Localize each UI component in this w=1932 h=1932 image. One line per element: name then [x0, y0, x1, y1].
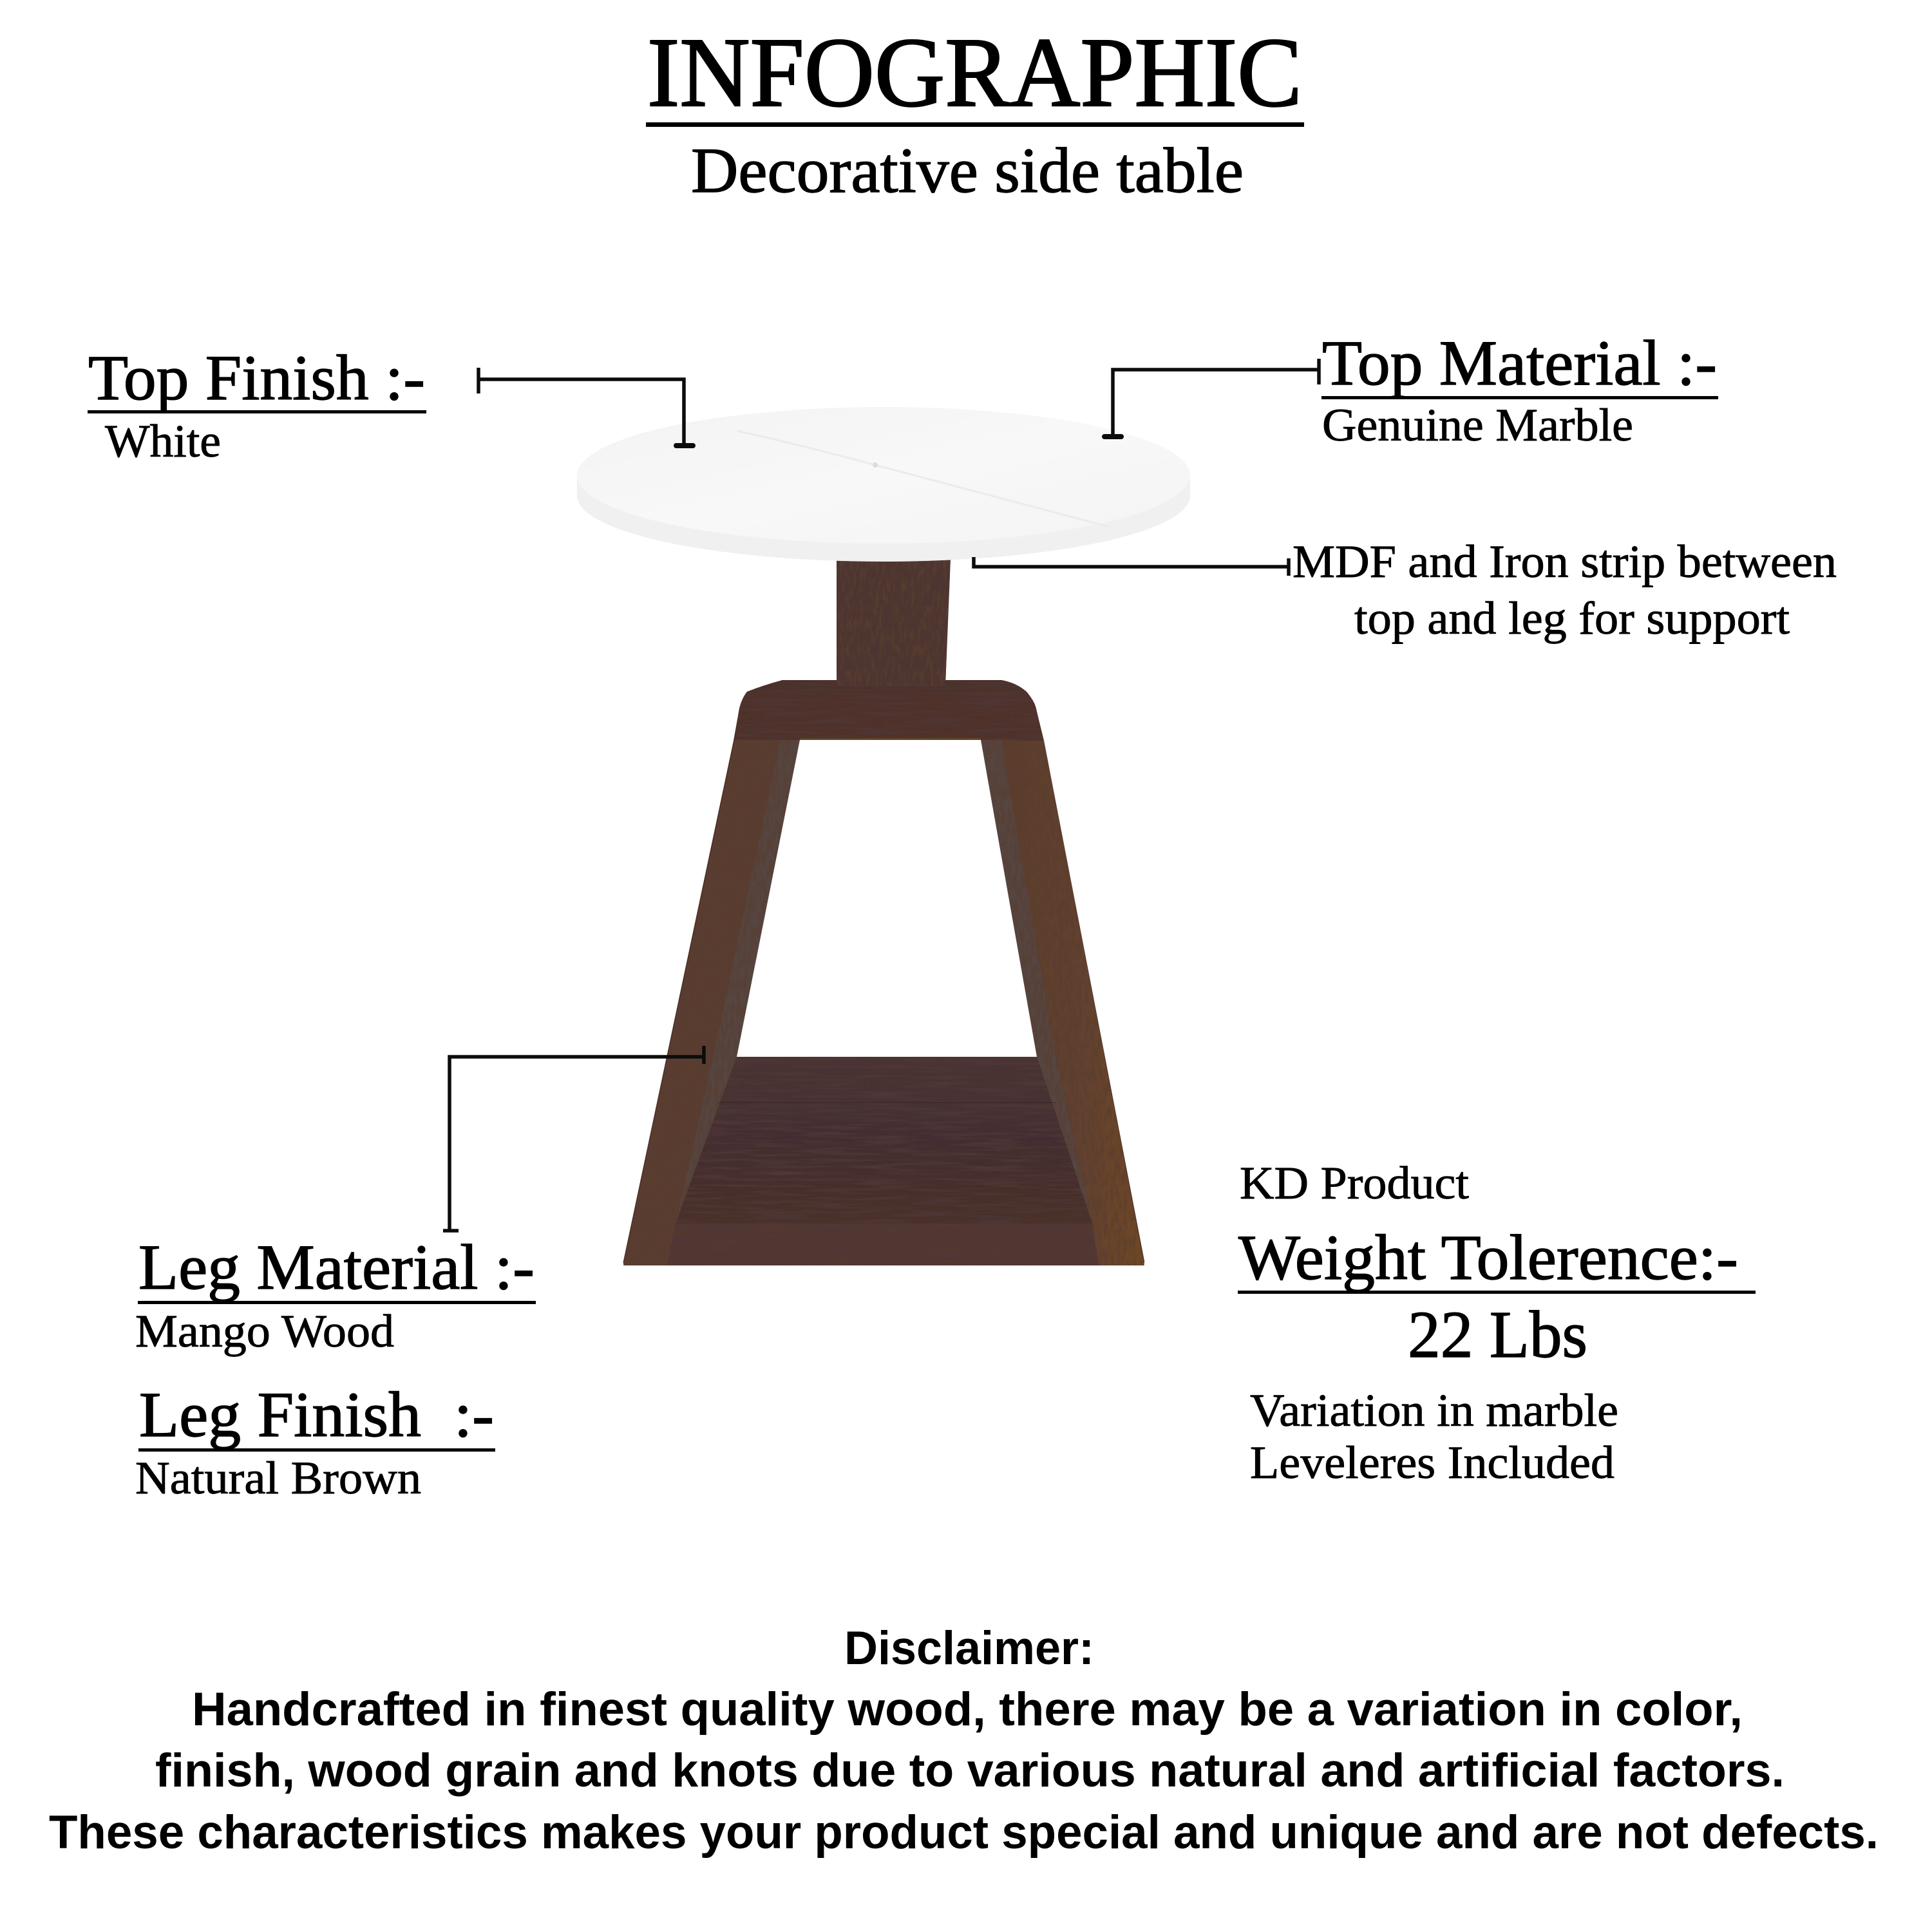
label: support strip note: [1293, 536, 1837, 644]
subtitle: Decorative side table: [691, 135, 1244, 206]
label: top material: [1321, 327, 1718, 451]
frame top plate: [747, 680, 1027, 692]
value: White: [105, 415, 221, 467]
marble center mark: [873, 462, 878, 468]
label: leg material: [135, 1231, 536, 1357]
table base frame: [623, 680, 1144, 1265]
connector: top material: [1104, 359, 1319, 437]
marble variation note: Variation in marble: [1250, 1385, 1618, 1436]
connector: MDF and iron strip: [974, 557, 1289, 576]
base front rail: [667, 1224, 1099, 1265]
disclaimer line three: These characteristics makes your product special and unique and are not defects.: [49, 1806, 1879, 1859]
line one: MDF and Iron strip between: [1293, 536, 1837, 587]
center post: [837, 559, 951, 686]
floor plank seam: [718, 1102, 1056, 1103]
marble veins: [737, 431, 1109, 527]
disclaimer: [49, 1622, 1879, 1859]
connector: leg material: [443, 1046, 704, 1231]
label: product specs: [1238, 1157, 1756, 1488]
connector: top finish: [478, 368, 693, 446]
right inner face: [981, 740, 1092, 1224]
crossbar lower highlight: [800, 738, 981, 740]
product: side table illustration: [577, 407, 1190, 1265]
title: INFOGRAPHIC: [647, 18, 1302, 128]
disclaimer line one: Handcrafted in finest quality wood, there may be a variation in color,: [192, 1683, 1743, 1736]
value: Genuine Marble: [1322, 399, 1633, 451]
underline: [138, 1301, 536, 1304]
value: Natural Brown: [135, 1452, 421, 1504]
left leg: [623, 740, 781, 1265]
underline: [138, 1448, 495, 1452]
right leg: [1001, 740, 1144, 1265]
KD note: KD Product: [1240, 1157, 1469, 1209]
weight value: 22 Lbs: [1408, 1298, 1587, 1372]
marble table top: [577, 407, 1190, 562]
heading: Leg Finish :-: [139, 1379, 494, 1450]
heading: Top Material :-: [1322, 327, 1717, 399]
line two: top and leg for support: [1354, 592, 1790, 644]
underline: [1238, 1291, 1756, 1294]
heading: Top Finish :-: [88, 342, 425, 413]
disclaimer line two: finish, wood grain and knots due to various natural and artificial factors.: [155, 1745, 1785, 1797]
marble edge: [577, 475, 1190, 562]
frame crossbar: [735, 692, 1043, 740]
underline: [88, 410, 426, 413]
left inner face: [676, 740, 800, 1224]
label: leg finish: [135, 1379, 495, 1504]
heading: Leg Material :-: [138, 1231, 535, 1303]
disclaimer heading: Disclaimer:: [844, 1622, 1094, 1674]
frame silhouette: [623, 680, 1144, 1265]
underline: [1321, 396, 1718, 399]
marble surface: [577, 407, 1190, 544]
base floor panel: [676, 1057, 1092, 1224]
title underline: [646, 122, 1304, 127]
value: Mango Wood: [135, 1305, 394, 1357]
weight heading: Weight Tolerence:-: [1238, 1222, 1738, 1293]
levelers note: Leveleres Included: [1250, 1437, 1615, 1488]
frame opening: [737, 740, 1037, 1057]
label: top finish: [88, 342, 426, 467]
